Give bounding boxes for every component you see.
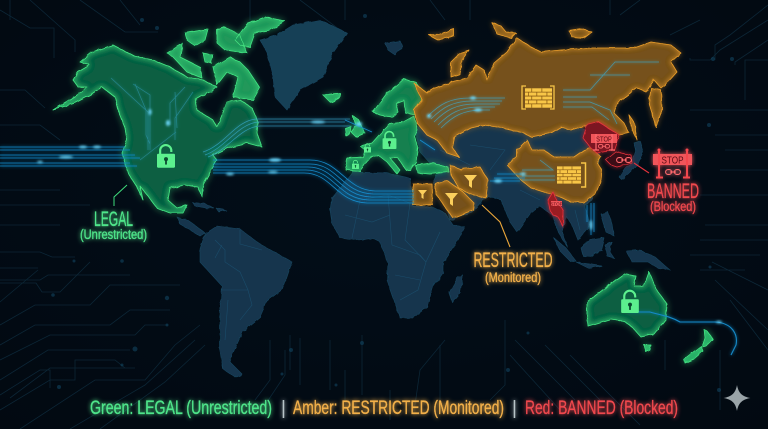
icon: lock australia (621, 291, 639, 313)
neutral blue land (178, 20, 670, 377)
legend: Green: LEGAL (Unrestricted) (90, 398, 272, 419)
Arctic islands (429, 23, 592, 77)
label: legal: (Unrestricted) (80, 227, 147, 242)
Madagascar (449, 275, 463, 302)
icon: funnel saudi arabia (445, 193, 458, 206)
Russia (414, 38, 681, 157)
icon: stop barrier korea (591, 134, 617, 150)
icon: lock north america (157, 145, 175, 168)
stream: atlantic to middle east (213, 160, 414, 203)
stream: eastern russia (563, 62, 659, 124)
stream: north america to europe (203, 119, 350, 157)
North America (53, 45, 262, 213)
stream: australia to new zealand (628, 312, 736, 355)
Central America and Caribbean (178, 203, 226, 236)
leader line: legal (114, 185, 127, 206)
stream: central asia (490, 174, 525, 181)
stream highlights (37, 96, 722, 323)
stream: western russia (428, 98, 505, 128)
Greenland (260, 20, 347, 110)
Saudi Arabia (435, 181, 474, 218)
icon: stop barrier banned callout: STOP (662, 156, 684, 166)
legend: Amber: RESTRICTED (Monitored) (293, 398, 504, 419)
Turkey (415, 163, 449, 174)
Tasmania and New Zealand (644, 329, 713, 363)
panel: restricted amber regions (413, 23, 681, 218)
icon: lock europe large (383, 132, 396, 149)
label: legal: LEGAL (94, 208, 133, 231)
legend: Red: BANNED (Blocked) (525, 398, 678, 419)
icon: firewall china (557, 163, 586, 187)
Australia (587, 272, 667, 337)
South America (200, 226, 292, 377)
Continental Europe (346, 116, 418, 174)
icon: lock france (364, 144, 371, 153)
icon: chain korea (617, 158, 631, 162)
leader line: banned (634, 163, 649, 173)
Svalbard (385, 41, 403, 55)
icon: sparkle watermark (724, 385, 750, 411)
circuit nodes (51, 14, 734, 392)
leader line: restricted (482, 205, 510, 247)
data streams (0, 62, 736, 355)
Kamchatka and Sakhalin (629, 88, 662, 140)
Scandinavia (373, 79, 428, 117)
Indonesia and Papua (554, 212, 670, 270)
UK and Ireland (345, 116, 365, 137)
label: banned: (Blocked) (650, 199, 696, 214)
icon: funnel iran (464, 175, 477, 188)
South Korea region (606, 152, 632, 167)
label: legal (80, 208, 147, 242)
icon: firewall russia (522, 86, 554, 109)
icon: stop barrier korea: STOP (596, 134, 612, 144)
label: restricted (474, 249, 552, 285)
stream: north american circuits (111, 78, 193, 160)
Canadian Arctic islands (167, 17, 285, 100)
Japan (619, 141, 643, 180)
Egypt (413, 184, 433, 205)
legend: | (281, 398, 286, 419)
panel: legal green regions (53, 17, 713, 363)
North Korea region (583, 122, 619, 153)
label: banned: BANNED (647, 180, 699, 203)
icon: funnel egypt (418, 190, 427, 199)
internal borders on neutral land (215, 145, 580, 340)
legend (90, 398, 678, 419)
legend: | (512, 398, 517, 419)
label: banned (647, 180, 699, 214)
Iceland (323, 93, 340, 102)
Myanmar (548, 192, 563, 227)
Asia (414, 122, 600, 248)
stream: pacific to north america (0, 147, 140, 166)
label: restricted: (Monitored) (485, 270, 541, 285)
icon: stop marker myanmar: STOP (550, 201, 563, 206)
China (507, 140, 602, 203)
stream: south china sea (587, 203, 594, 235)
panel: banned red regions (548, 122, 632, 227)
stream: europe inflow (345, 120, 435, 150)
label: restricted: RESTRICTED (474, 249, 552, 272)
icon: lock spain (352, 160, 359, 169)
icon: stop barrier banned callout (653, 148, 692, 178)
Africa (330, 172, 465, 318)
Iran (450, 165, 488, 198)
